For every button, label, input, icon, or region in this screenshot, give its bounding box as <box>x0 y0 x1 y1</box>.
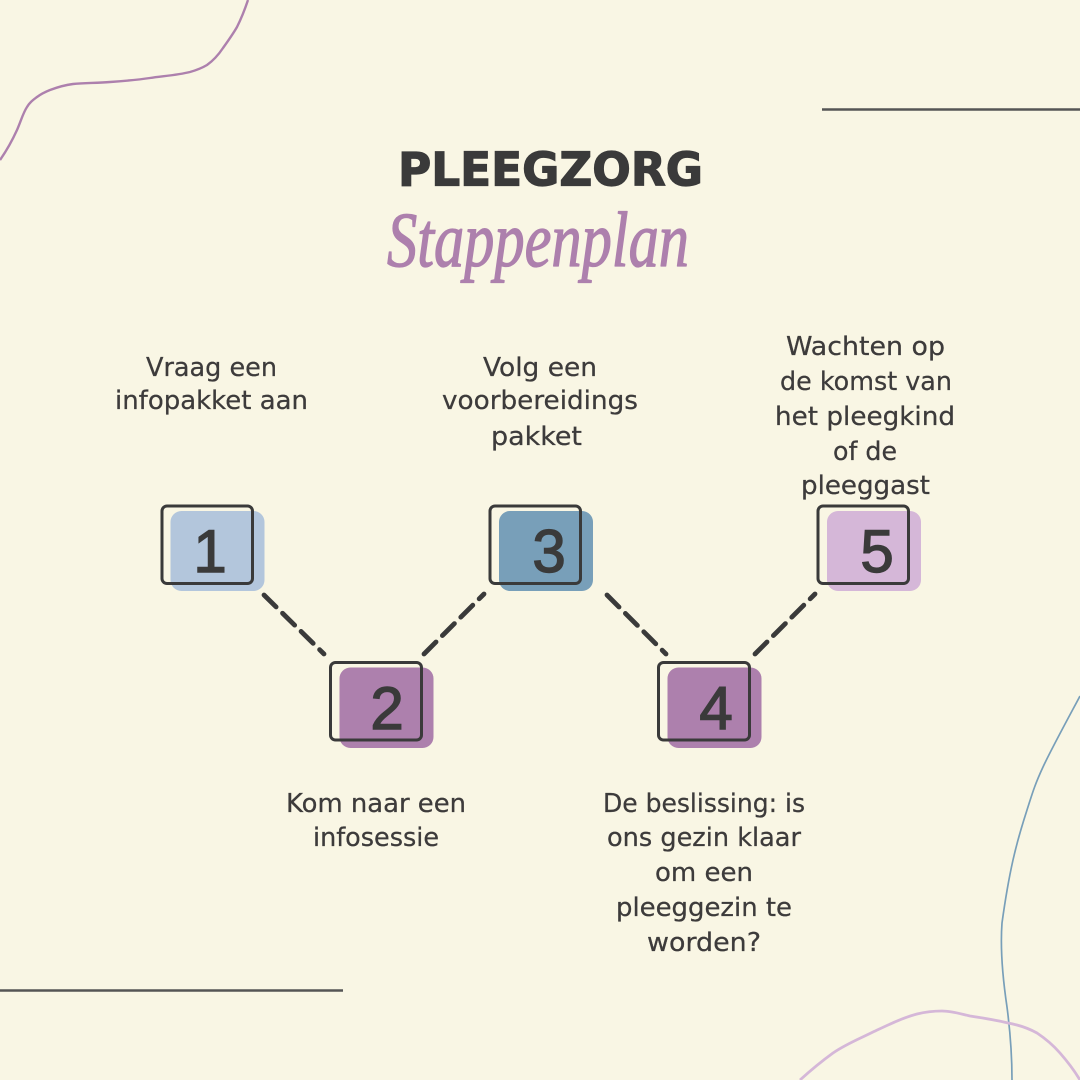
dashed connector 1 to 2 <box>264 595 324 654</box>
step 1 text: Vraag een <box>146 353 277 383</box>
step 5 text: Wachten op <box>786 332 945 362</box>
step 4 badge <box>658 662 762 748</box>
step 5 text <box>775 332 955 501</box>
step 1 text <box>115 353 308 416</box>
step 5 text: pleeggast <box>801 471 930 501</box>
step 4 badge: 4 <box>699 675 733 742</box>
step 2 badge <box>330 662 434 748</box>
step 4 text: worden? <box>647 928 761 958</box>
step 4 text: De beslissing: is <box>603 789 805 819</box>
step 3 text: Volg een <box>483 353 597 383</box>
step 5 text: de komst van <box>780 367 952 397</box>
step 2 text: infosessie <box>313 823 439 853</box>
step 5 badge <box>818 506 921 591</box>
step 3 text <box>442 353 638 452</box>
step 2 text <box>286 789 466 853</box>
step 3 text: pakket <box>491 422 582 452</box>
step 1 badge: 1 <box>193 518 227 585</box>
step 2 text: Kom naar een <box>286 789 466 819</box>
step 5 badge: 5 <box>860 518 894 585</box>
step 2 badge: 2 <box>370 675 404 742</box>
step 5 text: of de <box>833 437 897 467</box>
subtitle: Stappenplan: Stappenplan <box>387 196 689 283</box>
dashed connector 4 to 5 <box>755 594 815 654</box>
dashed connector 3 to 4 <box>607 595 666 654</box>
step 5 text: het pleegkind <box>775 402 955 432</box>
step 3 badge: 3 <box>532 518 566 585</box>
step 4 text: pleeggezin te <box>616 893 792 923</box>
title: PLEEGZORG: PLEEGZORG <box>398 142 703 196</box>
step 1 text: infopakket aan <box>115 386 308 416</box>
step 4 text: om een <box>655 858 753 888</box>
step 4 text <box>603 789 805 958</box>
step 3 text: voorbereidings <box>442 386 638 416</box>
step 1 badge <box>162 506 264 591</box>
dashed connector 2 to 3 <box>424 594 484 654</box>
step 3 badge <box>490 506 593 591</box>
step 4 text: ons gezin klaar <box>607 823 802 853</box>
